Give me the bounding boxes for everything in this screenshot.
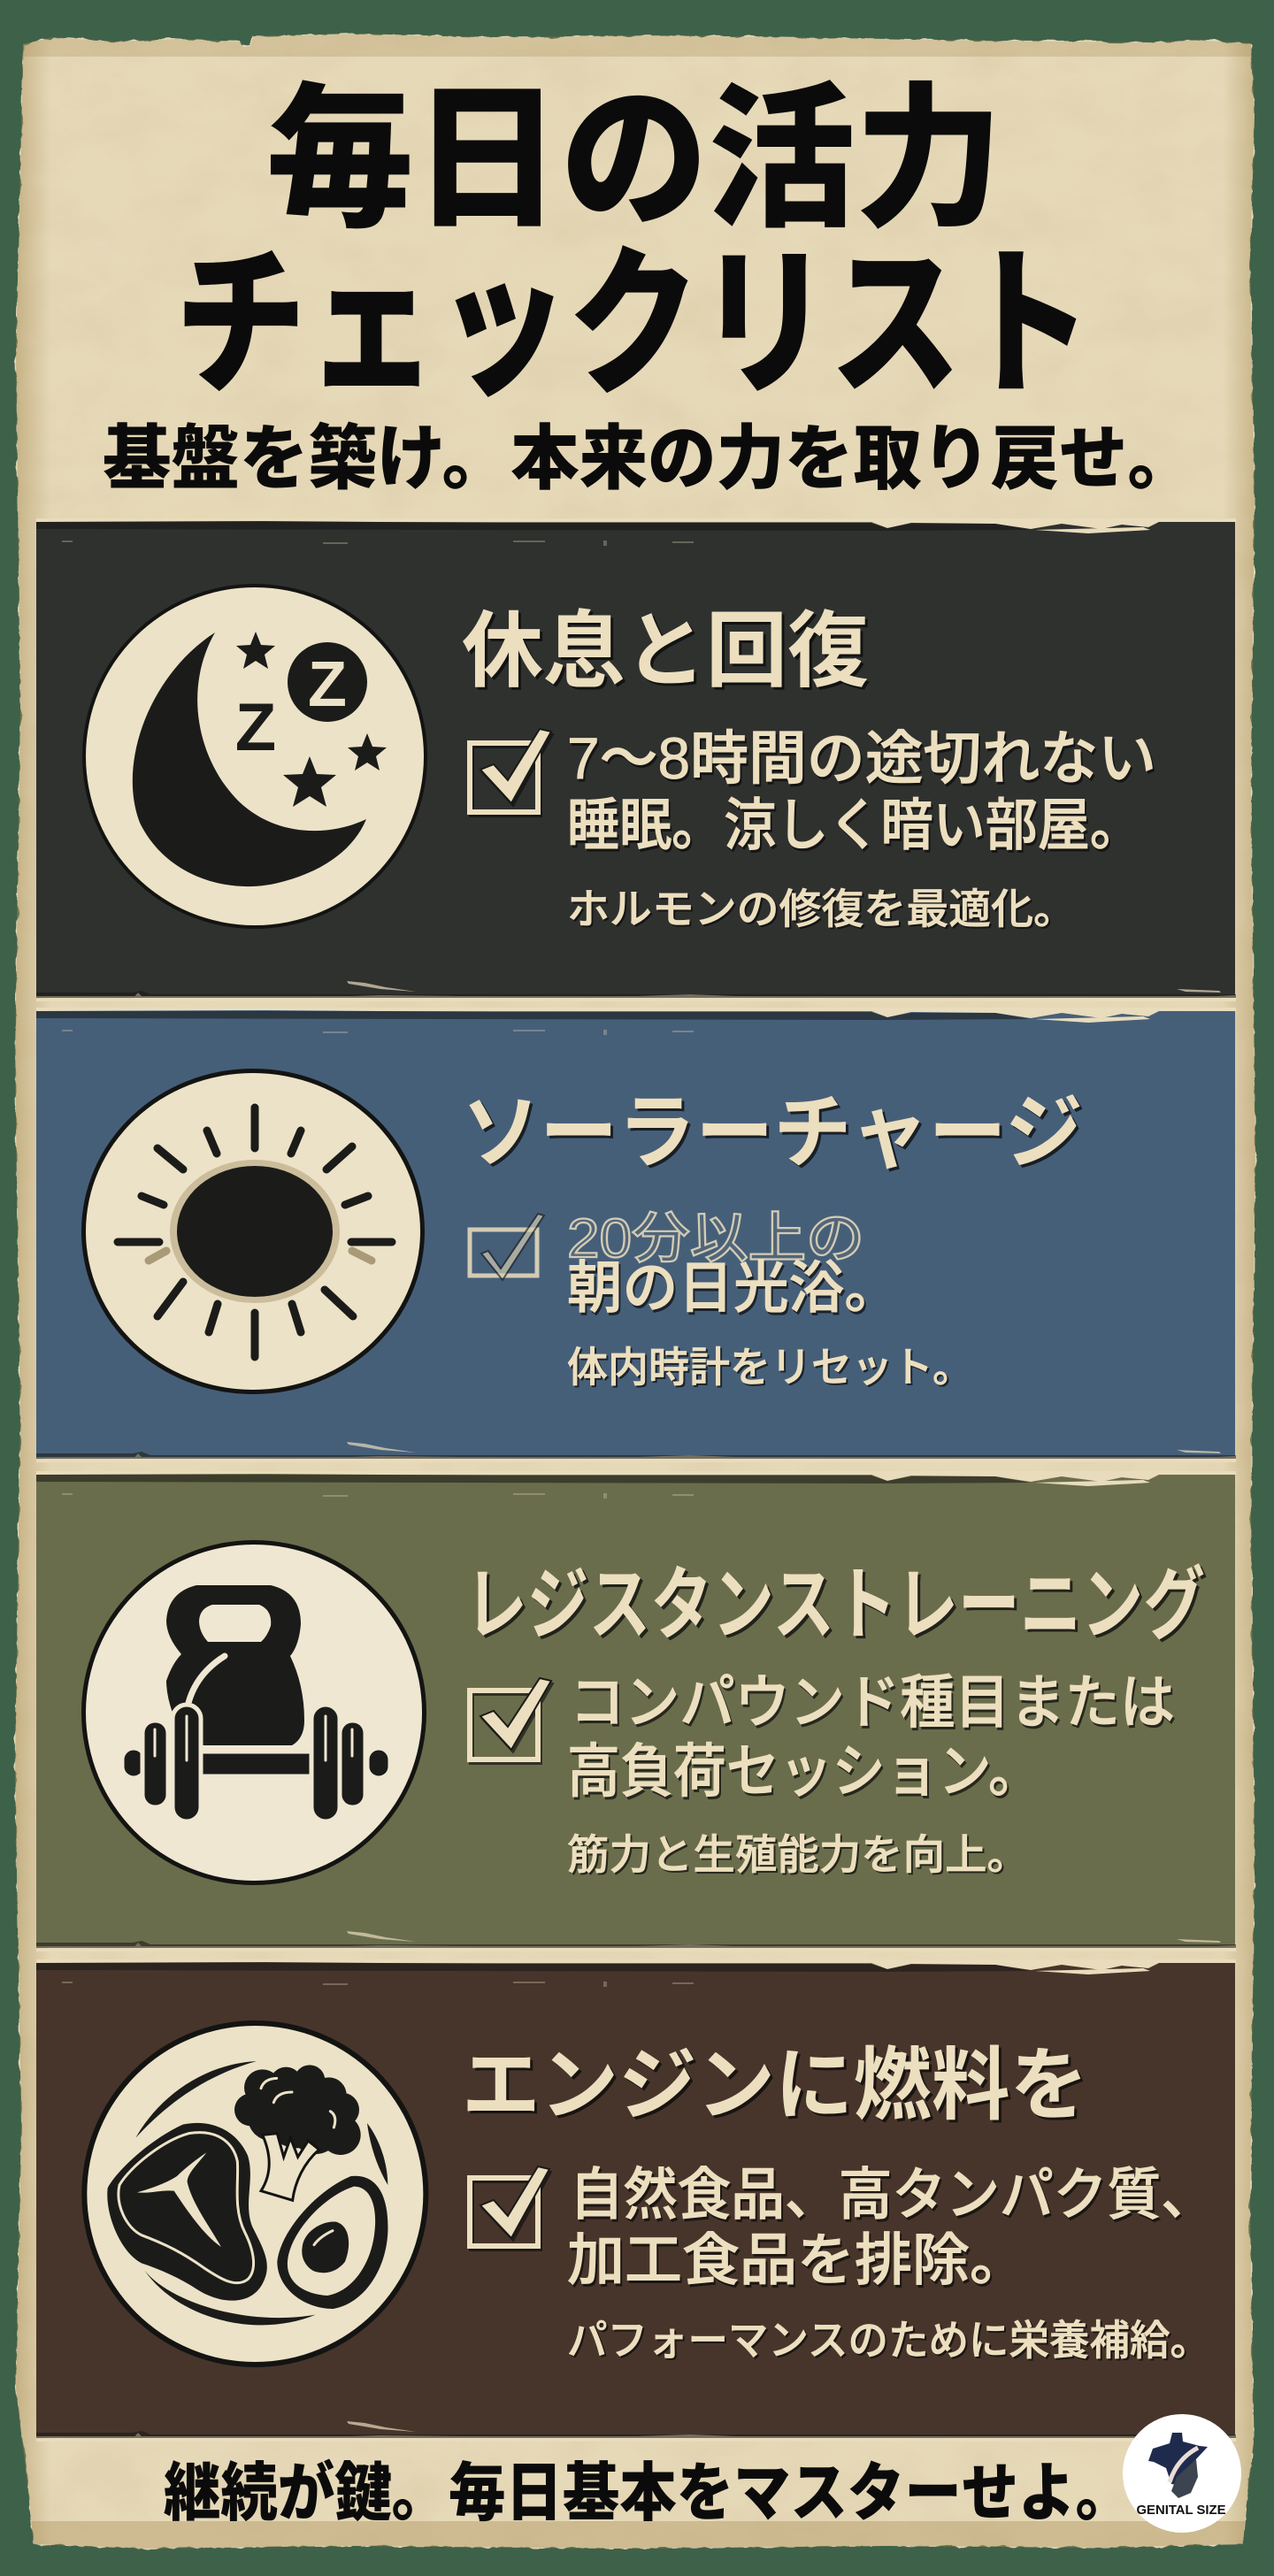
checklist text: 20分以上の xyxy=(567,1208,864,1269)
footer message: 継続が鍵。毎日基本をマスターせよ。 xyxy=(164,2458,1132,2529)
steak xyxy=(107,2123,267,2301)
checklist text: 7～8時間の途切れない xyxy=(567,725,1156,791)
broccoli xyxy=(234,2065,361,2200)
icon: checkbox xyxy=(470,1678,551,1760)
note text: 体内時計をリセット。 xyxy=(567,1344,973,1391)
note text: 筋力と生殖能力を向上。 xyxy=(567,1831,1029,1878)
icon: kettlebell and dumbbell xyxy=(81,1540,426,1885)
checklist text: 睡眠。涼しく暗い部屋。 xyxy=(567,794,1142,857)
title: チェックリスト xyxy=(175,234,1092,415)
checklist text: コンパウンド種目または xyxy=(570,1669,1175,1735)
logo badge xyxy=(1123,2414,1241,2533)
icon: steak, broccoli and avocado xyxy=(81,2020,428,2367)
note text: パフォーマンスのために栄養補給。 xyxy=(567,2317,1210,2364)
icon: moon and stars: Z xyxy=(235,690,276,765)
icon: sun xyxy=(81,1069,425,1394)
icon: checkbox xyxy=(470,1214,544,1280)
logo figure xyxy=(1148,2433,1208,2498)
checklist text: 朝の日光浴。 xyxy=(567,1256,900,1320)
icon: moon and stars xyxy=(82,584,427,929)
subtitle: 基盤を築け。本来の力を取り戻せ。 xyxy=(103,419,1196,498)
checklist text: 高負荷セッション。 xyxy=(567,1738,1041,1804)
panel: rest and recovery xyxy=(36,518,1236,1001)
heading: fuel the engine: エンジンに燃料を xyxy=(462,2042,1088,2130)
logo badge: GENITAL SIZE xyxy=(1136,2503,1226,2518)
icon: checkbox xyxy=(470,729,551,812)
checklist text xyxy=(567,1208,900,1320)
panel: solar charge xyxy=(36,1008,1236,1462)
heading: solar charge: ソーラーチャージ xyxy=(462,1088,1083,1178)
avocado xyxy=(277,2176,388,2309)
heading: rest: 休息と回復 xyxy=(462,604,869,697)
checklist text xyxy=(567,2163,1215,2292)
title xyxy=(175,73,1092,415)
icon: moon and stars: Z xyxy=(308,649,347,720)
note text: ホルモンの修復を最適化。 xyxy=(567,886,1076,932)
panel: fuel the engine xyxy=(36,1959,1236,2442)
checklist text xyxy=(567,1669,1175,1804)
icon: checkbox xyxy=(470,2166,549,2246)
panel: resistance training xyxy=(36,1471,1236,1951)
checklist text: 自然食品、高タンパク質、 xyxy=(570,2163,1215,2227)
checklist text: 加工食品を排除。 xyxy=(567,2228,1027,2292)
checklist text xyxy=(567,725,1156,857)
title: 毎日の活力 xyxy=(266,73,1002,247)
